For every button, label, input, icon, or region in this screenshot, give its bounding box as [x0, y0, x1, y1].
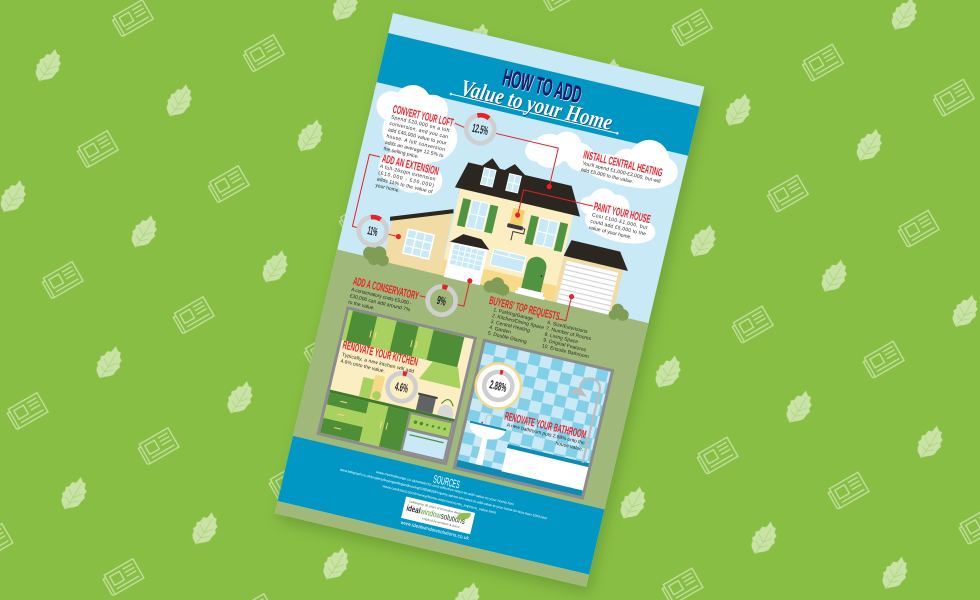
upper right window: [525, 215, 568, 252]
sources: www.moneylounge.co.uk/article/10-cost-effective-ways-to-add-value-to-your-home.htm: [376, 470, 514, 506]
infographic poster: [275, 13, 704, 587]
footer strip: [275, 501, 589, 587]
shower: [554, 374, 602, 463]
text: install central heating: INSTALL CENTRAL HEATING: [582, 149, 664, 180]
panel: kitchen: [316, 306, 477, 466]
text: add an extension: ADD AN EXTENSION: [381, 153, 440, 178]
buyers top requests: 1. Parking/Garage: [493, 307, 534, 322]
sources: www.telegraph.co.uk/property/buyingsellingandmoving/10958826/Property-advice-ten-ways-to-add-value-to-your-home-for-less-than-1000.html: [340, 468, 548, 520]
main wall: [440, 187, 574, 302]
bathroom heading: [501, 411, 588, 453]
text: add a conservatory: to the value.: [348, 300, 375, 312]
text: install central heating: You'll spend £1,000-£3,000, but will: [582, 161, 661, 185]
upper left window: [457, 197, 499, 234]
bathroom heading: A new bathroom puts 2.88% onto the: [506, 422, 585, 447]
footer band: [278, 436, 604, 575]
house: [379, 138, 646, 318]
main roof: [455, 151, 588, 217]
text: convert your loft: adds an average 12.5% to: [384, 140, 444, 159]
front door: [515, 254, 553, 300]
upper cabinets: [342, 310, 464, 367]
panel: bathroom: [452, 338, 614, 500]
logo: idealwindowsolutions: [405, 503, 466, 526]
text: add an extension: A full-26sqm extension: [379, 164, 436, 183]
middle window: [489, 248, 527, 273]
cooker hood: [419, 359, 465, 389]
floor: [456, 460, 583, 496]
buyers top requests: 3. Central Heating: [490, 319, 531, 334]
text: paint your house: could add £5,000 to the: [590, 219, 647, 238]
donut 2.88%: 2.88%: [488, 377, 508, 395]
bushes: [361, 243, 631, 325]
text: install central heating: add £5,000 to the value.: [580, 167, 634, 185]
text: add an extension: [375, 153, 440, 202]
porch: [442, 232, 491, 286]
donut 11%: 11%: [366, 223, 379, 239]
text: convert your loft: Spend £20,000 on a loft: [390, 114, 451, 134]
kitchen heading: Typically, a new kitchen will add: [341, 352, 415, 375]
donut 4.6%: [385, 370, 418, 404]
connector lines: [340, 106, 607, 330]
donut 9%: 9%: [436, 293, 448, 309]
kitchen objects: [359, 372, 458, 419]
kitchen heading: [338, 340, 419, 382]
dormer windows: [480, 167, 522, 194]
website url: www.idealwindowsolutions.co.uk: [400, 520, 470, 542]
bath: [501, 444, 589, 490]
donut 2.88%: [471, 359, 525, 413]
buyers top requests: 2. Kitchen/Dining Space: [491, 313, 545, 331]
sources: SOURCES: [432, 473, 461, 491]
title: Value to your Home: [458, 75, 615, 135]
text: convert your loft: CONVERT YOUR LOFT: [391, 104, 455, 130]
logo: [401, 496, 475, 534]
title: Value to your Home: [459, 76, 615, 136]
text: add a conservatory: [348, 276, 420, 321]
buyers top requests: 4. Garden: [489, 325, 512, 336]
kitchen heading: 4.6% onto the value.: [340, 358, 386, 375]
buyers top requests: [481, 295, 597, 360]
text: paint your house: [588, 201, 652, 244]
text: add an extension: adds 11% to the value of: [376, 176, 434, 195]
title: [449, 53, 628, 138]
text: add a conservatory: ADD A CONSERVATORY: [352, 276, 420, 303]
donut 12.5%: 12.5%: [471, 121, 490, 138]
text: paint your house: PAINT YOUR HOUSE: [592, 201, 652, 226]
header band: [377, 33, 700, 156]
donut 9%: [425, 284, 458, 317]
donut 11%: [356, 214, 390, 248]
text: paint your house: value of your home.: [588, 225, 632, 241]
paint roller: [504, 207, 529, 243]
extension: [380, 195, 455, 275]
title: HOW TO ADD: [500, 65, 584, 110]
logo: Celebrating 30 years of innovative design: [409, 499, 463, 516]
donut 12.5%: [463, 112, 497, 146]
text: convert your loft: add £40,000 value to your: [387, 127, 447, 147]
sink: [461, 411, 509, 469]
text: convert your loft: house. A loft conversion: [386, 133, 446, 153]
bathroom heading: house value.: [555, 441, 584, 453]
buyers top requests: 6. Size/Extensions: [547, 320, 589, 335]
bathroom heading: RENOVATE YOUR BATHROOM: [503, 411, 587, 442]
ground: [293, 249, 649, 510]
text: add a conservatory: £30,000 can add around 7%: [349, 293, 411, 313]
buyers top requests: 10. Ensuite Bathroom: [541, 343, 589, 360]
poster shadow: [278, 20, 707, 594]
clouds: [359, 76, 684, 252]
text: add an extension: (£10,000 - £30,000): [378, 170, 435, 189]
buyers top requests: 5. Double Glazing: [487, 330, 527, 346]
logo: inspired by windows & doors: [422, 516, 460, 529]
title: HOW TO ADD: [500, 64, 584, 109]
buyers top requests: 8. Living Space: [544, 332, 579, 345]
text: convert your loft: the selling price.: [383, 146, 419, 160]
text: add an extension: your home.: [375, 183, 400, 194]
oven: [400, 412, 454, 462]
text: convert your loft: conversion, and you can: [389, 121, 449, 140]
buyers top requests: BUYERS' TOP REQUESTS: [488, 295, 561, 323]
worktop and lower cabinets: [320, 390, 455, 462]
text: convert your loft: [383, 104, 455, 166]
donut 4.6%: 4.6%: [394, 379, 410, 396]
buyers top requests: 7. Number of Rooms: [545, 326, 592, 342]
text: paint your house: Cost £100-£1,000, but: [591, 212, 649, 231]
sources: www.confused.com/money/home-improvements_improve_value.html: [382, 484, 497, 515]
kitchen heading: RENOVATE YOUR KITCHEN: [341, 340, 419, 369]
text: add a conservatory: A conservatory costs £5,000 -: [351, 287, 413, 307]
garage: [553, 239, 632, 317]
buyers top requests: 9. Original Features: [543, 337, 587, 353]
text: install central heating: [579, 149, 664, 191]
